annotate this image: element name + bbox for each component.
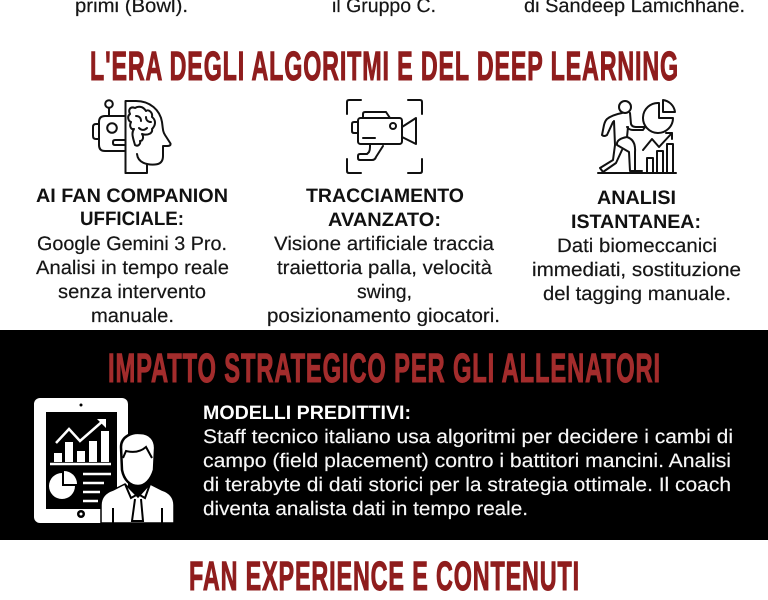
panel: impatto strategico — [0, 330, 768, 540]
feature: tracciamento avanzato: Visione artificiale traccia — [274, 233, 494, 255]
feature: analisi istantanea: ISTANTANEA: — [571, 211, 701, 233]
feature: AI fan companion: UFFICIALE: — [80, 208, 184, 230]
feature: AI fan companion: AI FAN COMPANION — [36, 185, 228, 207]
feature: analisi istantanea: Dati biomeccanici — [557, 235, 717, 257]
feature: AI fan companion: manuale. — [91, 305, 174, 327]
text block: modelli predittivi: campo (field placement) contro i battitori mancini. Analisi — [203, 450, 731, 472]
text block: modelli predittivi: di terabyte di dati storici per la strategia ottimale. Il coach — [203, 474, 731, 496]
icon: tracking camera — [347, 100, 422, 173]
feature: AI fan companion: Analisi in tempo reale — [36, 257, 229, 279]
icon: tablet with analyst — [34, 398, 174, 523]
feature: analisi istantanea: immediati, sostituzione — [532, 259, 741, 281]
feature: analisi istantanea — [532, 187, 741, 305]
feature: AI fan companion: Google Gemini 3 Pro. — [37, 233, 227, 255]
feature: tracciamento avanzato: TRACCIAMENTO — [306, 185, 464, 207]
feature: tracciamento avanzato — [267, 185, 500, 327]
feature: tracciamento avanzato: AVANZATO: — [328, 209, 441, 231]
feature: AI fan companion — [36, 185, 229, 327]
text block: modelli predittivi: MODELLI PREDITTIVI: — [203, 402, 411, 424]
feature: analisi istantanea: del tagging manuale. — [543, 283, 731, 305]
feature: tracciamento avanzato: posizionamento giocatori. — [267, 305, 500, 327]
icon: athlete with analytics — [598, 100, 676, 173]
top text fragments — [75, 0, 745, 17]
feature: AI fan companion: senza intervento — [58, 281, 206, 303]
feature: analisi istantanea: ANALISI — [597, 187, 676, 209]
feature: tracciamento avanzato: swing, — [357, 281, 412, 303]
text block: modelli predittivi: diventa analista dati in tempo reale. — [203, 498, 528, 520]
text block: modelli predittivi — [203, 402, 733, 520]
icon: robot and human brain — [93, 100, 171, 173]
text block: modelli predittivi: Staff tecnico italiano usa algoritmi per decidere i cambi di — [203, 426, 733, 448]
feature: tracciamento avanzato: traiettoria palla, velocità — [277, 257, 492, 279]
